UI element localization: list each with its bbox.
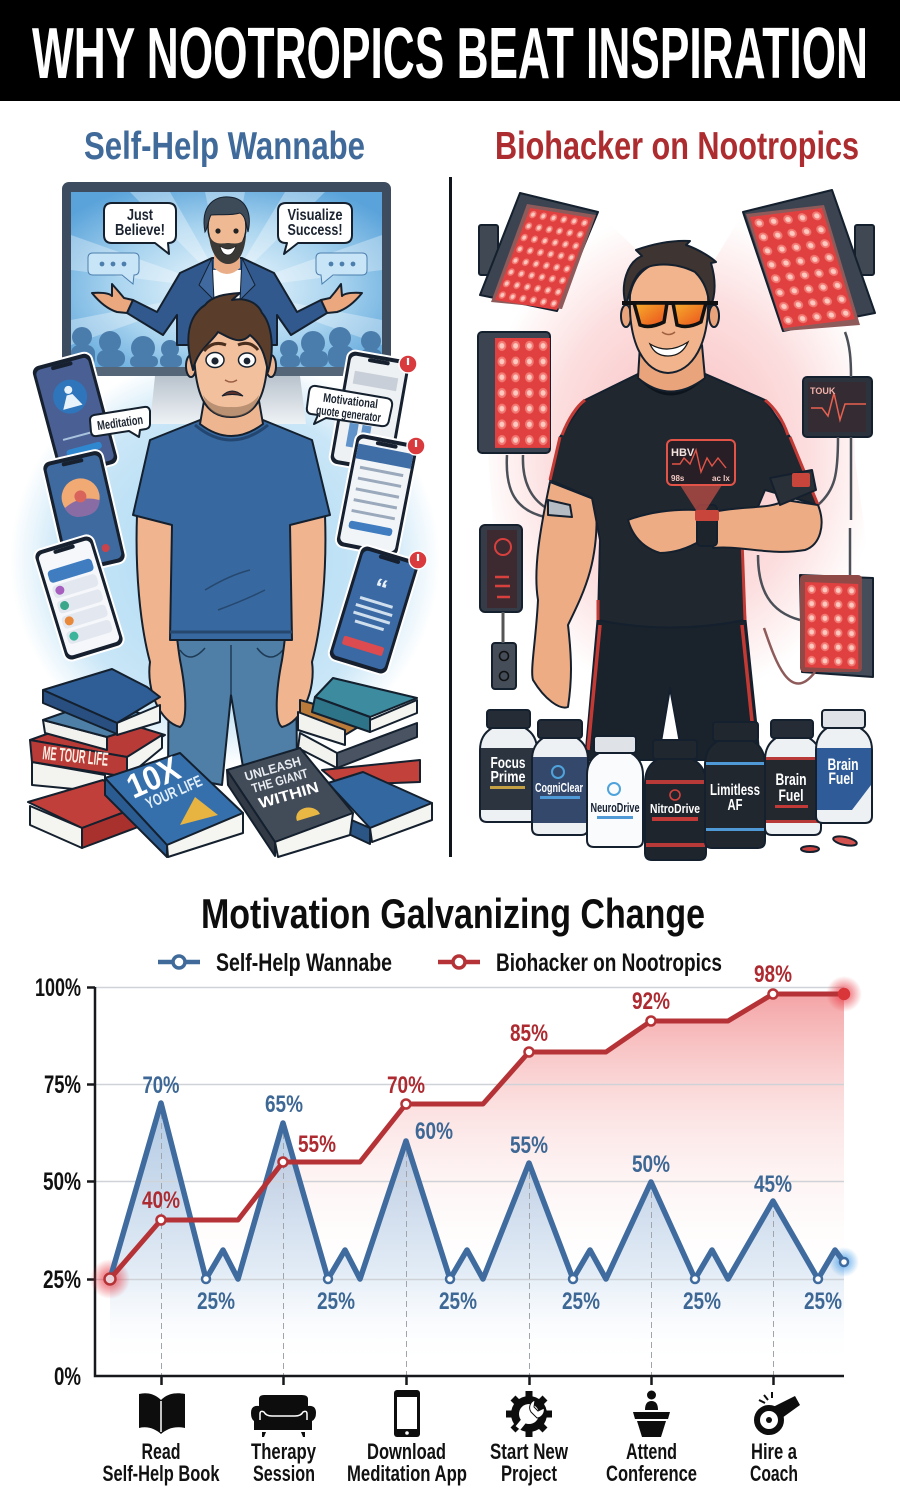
x axis category: download meditation app: Meditation App [347,1461,467,1486]
callout: quote generator: quote generator [315,403,382,425]
data labels: self-help wannabe: 60% [415,1118,453,1145]
bottle: CogniClear: CogniClear [535,780,583,795]
y axis labels: 50% [43,1168,81,1196]
capsules [801,835,858,852]
black compression shirt [550,373,818,628]
data labels: self-help wannabe: 55% [510,1132,548,1159]
data labels: self-help wannabe: 25% [562,1288,600,1315]
x axis category: start new project: Project [501,1461,557,1486]
arm band and wrist strap [770,470,816,505]
bottle: CogniClear [532,720,588,835]
bottle: Focus Prime: Prime [490,769,526,786]
speech bubble: Visualize Success: Success! [288,222,342,239]
icon: smartphone [394,1390,420,1437]
x axis category: attend conference [606,1390,697,1486]
data labels: biohacker on nootropics: 85% [510,1020,548,1047]
phone: quote with alert: “ [370,572,391,604]
monitor with motivational speaker [62,182,391,424]
bottle: NeuroDrive [587,736,643,847]
callout: meditation: Meditation [96,412,144,433]
bottle: NitroDrive [645,740,706,860]
data labels: biohacker on nootropics: 55% [298,1131,336,1158]
bottle: Limitless AF: Limitless [710,782,760,799]
panel: biohacker illustration [478,190,880,860]
callout: quote generator [307,386,392,426]
x axis category: hire a coach: Coach [750,1461,798,1486]
book: blue right [328,772,432,844]
bottle: Brain Fuel blue [816,710,872,823]
data labels: self-help wannabe: 25% [439,1288,477,1315]
eyes and mouth [206,352,224,368]
heart rate monitor [803,377,872,437]
x axis category: attend conference: Attend [626,1439,677,1464]
book: me tour life: ME TOUR LIFE [41,743,109,771]
x axis category: hire a coach [750,1392,800,1486]
wall bracket right [855,225,874,275]
line chart: motivation over actions [35,961,862,1391]
book stack left [30,669,165,792]
head [186,355,196,377]
black leggings [585,615,760,760]
power brick [480,525,522,689]
blue t-shirt [133,420,330,640]
chart heading: Motivation Galvanizing Change [201,890,705,937]
holographic HRV readout [667,440,735,510]
icon: sofa [251,1395,316,1437]
head [621,305,631,327]
icon: speaker at podium [633,1390,670,1437]
sunglasses [622,303,718,326]
x axis category: download meditation app: Download [367,1439,446,1464]
holographic HRV readout: 98s [671,474,685,483]
wall bracket left [479,225,498,275]
bottle: Brain Fuel dark: Brain [776,770,806,789]
blue area fill [110,1103,844,1376]
data labels: self-help wannabe: 25% [804,1288,842,1315]
phone: checklist with alert [335,432,419,558]
phone: meditation app [30,351,120,479]
bottle: NeuroDrive: NeuroDrive [590,800,640,815]
callout: meditation [90,407,150,437]
phone: sunrise app [41,449,127,575]
book: Unleash the Giant Within: WITHIN [257,779,321,812]
red area fill [110,994,844,1376]
bottle: Limitless AF: AF [728,797,743,814]
x axis category: therapy session: Therapy [251,1439,317,1464]
speech bubble: Just Believe [104,203,176,254]
red light panel bottom right [800,575,873,677]
cables [507,332,851,684]
holographic HRV readout: HBV [671,447,695,459]
hair [624,241,716,308]
speech bubble: Visualize Success: Visualize [288,207,343,224]
bottle: Brain Fuel dark [765,720,821,835]
bottle: NitroDrive: NitroDrive [650,801,700,816]
holographic HRV readout: ac lx [712,474,730,483]
start and end glows [90,976,862,1299]
icon: gear with wrench [506,1391,552,1437]
book: red bottom left [28,780,138,848]
red light panel top right [743,190,875,331]
icon: whistle [757,1392,800,1432]
ellipsis bubble right [316,253,367,284]
bottle: Focus Prime: Focus [490,755,526,772]
book: Unleash the Giant Within [227,748,353,857]
data labels: self-help wannabe [142,1072,842,1315]
data labels: biohacker on nootropics: 70% [387,1072,425,1099]
icon: open book [139,1393,185,1435]
bottle: Focus Prime [480,710,537,822]
book: 10X Your Life: YOUR LIFE [143,773,205,813]
x axis category: read self-help book: Self-Help Book [102,1461,220,1486]
x axis category: hire a coach: Hire a [751,1439,798,1464]
panel: self-help wannabe illustration [10,182,440,857]
y axis labels: 100% [35,974,81,1002]
data labels: biohacker on nootropics: 40% [142,1187,180,1214]
phone: notes with alert [328,349,412,475]
data labels: biohacker on nootropics: 92% [632,988,670,1015]
data labels: self-help wannabe: 25% [197,1288,235,1315]
phone: quote with alert [327,544,421,676]
speech bubble: Just Believe: Believe! [115,222,165,239]
book stack right [298,678,420,785]
x axis category: therapy session [251,1395,317,1486]
data labels: self-help wannabe: 25% [683,1288,721,1315]
heading: Self-Help Wannabe: Self-Help Wannabe [84,125,365,168]
x axis category: read self-help book [102,1393,220,1486]
data labels: self-help wannabe: 45% [754,1171,792,1198]
audience silhouettes [71,327,382,367]
center divider [449,177,452,857]
data labels: biohacker on nootropics: 98% [754,961,792,988]
data labels: self-help wannabe: 50% [632,1151,670,1178]
axes [87,987,844,1385]
grid lines [95,988,844,1280]
data labels: self-help wannabe: 70% [142,1072,180,1099]
x axis category: start new project [490,1391,569,1486]
data labels: self-help wannabe: 65% [265,1091,303,1118]
speech bubble: Visualize Success [278,203,352,254]
chart legend: Biohacker on Nootropics [496,949,722,977]
book: 10X Your Life [105,749,243,857]
hair [188,293,272,372]
x axis category: therapy session: Session [253,1461,315,1486]
x axis category: download meditation app [347,1390,467,1486]
neck [200,395,263,436]
y axis labels: 0% [54,1363,81,1391]
alert badges [399,355,427,569]
data labels: self-help wannabe: 25% [317,1288,355,1315]
drop lines [162,1103,774,1376]
bottle: Brain Fuel dark: Fuel [778,786,804,805]
bottle: Brain Fuel blue: Fuel [828,769,854,788]
y axis labels [35,974,81,1391]
book: Unleash the Giant Within: THE GIANT [250,765,310,796]
forearm and hand [713,500,822,552]
data labels: biohacker on nootropics [142,961,792,1214]
bottle: Limitless AF [705,722,765,848]
speaker figure [92,197,362,345]
biohacker man [532,241,822,760]
phone: app list [32,533,126,663]
x axis category: start new project: Start New [490,1439,569,1464]
light blue backdrop glow [10,355,440,765]
chart legend: Self-Help Wannabe [216,949,392,977]
stressed man [133,293,330,785]
book: Unleash the Giant Within: UNLEASH [243,753,303,784]
bottle: Brain Fuel blue: Brain [828,755,858,774]
series: biohacker on nootropics [104,989,849,1284]
heart rate monitor: TOUK [810,386,836,396]
y axis labels: 25% [43,1266,81,1294]
red light panel left [478,332,550,453]
red light panel top left [480,193,598,311]
jeans [168,640,297,785]
x axis category: read self-help book: Read [142,1439,180,1464]
y axis labels: 75% [44,1071,81,1099]
x axis category: attend conference: Conference [606,1461,697,1486]
speech bubble: Just Believe: Just [127,207,153,224]
red glow backdrop [480,210,880,700]
callout: quote generator: Motivational [322,391,379,411]
series: self-help wannabe [110,1103,848,1283]
ellipsis bubble left [88,253,139,284]
arms [137,515,185,727]
left arm [532,482,597,708]
chart legend [158,949,722,977]
book: 10X Your Life: 10X [121,749,186,806]
neck [638,345,705,392]
